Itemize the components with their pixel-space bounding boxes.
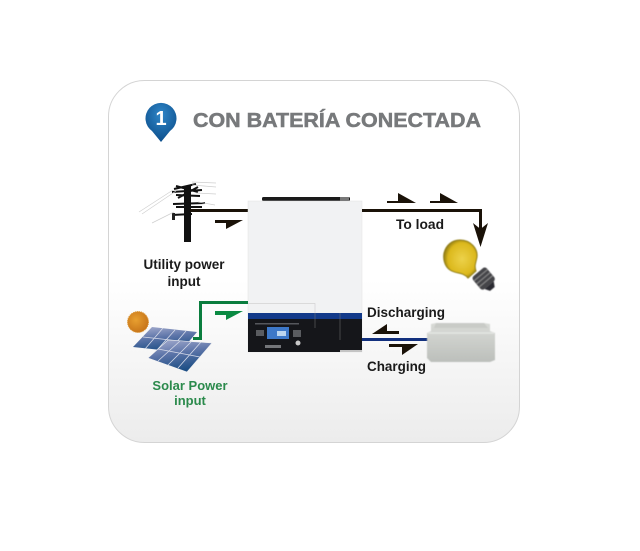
label: to load: To load <box>396 216 444 232</box>
connector: battery line <box>362 338 428 341</box>
arrow: load flow 1 <box>387 193 416 203</box>
icon: utility pole <box>139 182 216 242</box>
arrow: charging flow <box>389 344 418 355</box>
arrow: load flow 2 <box>430 193 458 203</box>
label: discharging: Discharging <box>367 304 445 320</box>
arrow: discharging flow <box>372 324 399 334</box>
label: utility power input <box>143 257 225 289</box>
inverter unit <box>248 197 362 352</box>
icon: battery <box>427 323 495 362</box>
connector: utility line <box>190 209 248 212</box>
icon: solar panels <box>133 327 212 372</box>
label: utility power input: input <box>168 274 201 289</box>
icon: numbered location pin: 1 <box>155 108 167 130</box>
arrow: solar flow <box>215 311 243 320</box>
label: charging: Charging <box>367 358 426 374</box>
icon: numbered location pin <box>146 103 176 142</box>
connector: load line with arrowhead <box>362 210 488 247</box>
icon: sun <box>128 312 148 332</box>
title: CON BATERÍA CONECTADA <box>193 109 481 132</box>
label: solar power input <box>152 378 228 408</box>
label: utility power input: Utility power <box>143 257 225 272</box>
label: solar power input: input <box>174 393 207 408</box>
label: solar power input: Solar Power <box>152 378 228 393</box>
connector: solar line <box>193 302 248 338</box>
arrow: utility flow <box>215 220 243 229</box>
panel: background card <box>108 80 520 442</box>
icon: light bulb <box>444 240 499 295</box>
